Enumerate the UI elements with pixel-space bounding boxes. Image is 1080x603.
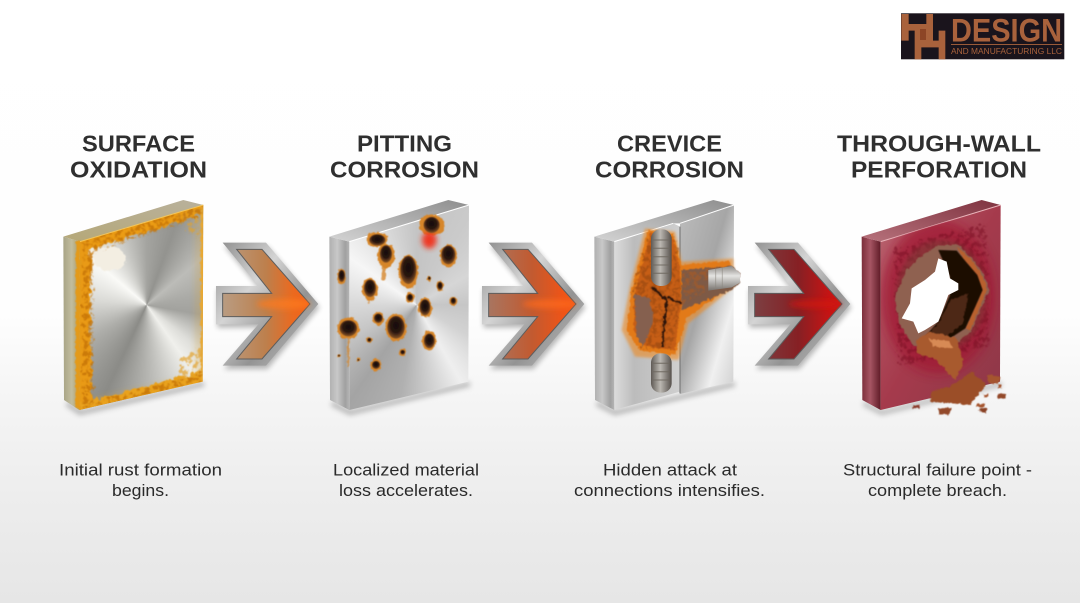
front flange: [614, 223, 680, 410]
heading: crevice corrosion: CREVICE: [617, 130, 722, 156]
back plate: [680, 205, 734, 394]
horizontal weld bead: [682, 266, 740, 310]
heading: through-wall perforation: THROUGH-WALL: [837, 130, 1041, 156]
icon: plate with pitting corrosion: [329, 200, 472, 418]
heading: surface oxidation: OXIDATION: [70, 156, 207, 182]
icon: plate with crevice corrosion at a welded joint: [594, 200, 740, 413]
rust halos: [337, 214, 457, 371]
caption: through-wall perforation: Structural failure point -: [843, 460, 1032, 480]
logo: AND MANUFACTURING LLC: [951, 47, 1062, 56]
caption: through-wall perforation: complete breach.: [868, 481, 1007, 500]
red glow: [422, 231, 437, 249]
see-through opening: [902, 258, 958, 333]
arrow 3: [748, 243, 852, 369]
heading: surface oxidation: SURFACE: [82, 130, 195, 156]
corroded rock: [634, 294, 653, 347]
heading: surface oxidation: [70, 130, 207, 182]
heading: crevice corrosion: [595, 130, 744, 182]
caption: crevice corrosion: [574, 460, 765, 500]
icon: plate with surface oxidation: [63, 200, 206, 418]
heading: through-wall perforation: [837, 130, 1041, 182]
vertical weld bead: [651, 229, 672, 393]
heading: pitting corrosion: PITTING: [357, 130, 452, 156]
logo: [901, 12, 1064, 59]
arrow 1: [216, 243, 320, 369]
caption: surface oxidation: Initial rust formation: [59, 460, 222, 480]
logo: DESIGN: [951, 12, 1062, 48]
caption: crevice corrosion: Hidden attack at: [603, 460, 737, 480]
dark interior: [925, 250, 983, 338]
caption: crevice corrosion: connections intensifies.: [574, 481, 765, 500]
pits: [338, 217, 456, 369]
heading: pitting corrosion: [330, 130, 479, 182]
rust halo: [622, 228, 734, 360]
heading: crevice corrosion: CORROSION: [595, 156, 744, 182]
broken flap: [917, 332, 963, 381]
debris: [913, 372, 1007, 415]
arrow 2: [482, 243, 586, 369]
icon: plate with through-wall perforation: [862, 200, 1007, 415]
caption: through-wall perforation: [843, 460, 1032, 500]
rim of the hole: [895, 245, 990, 347]
caption: surface oxidation: [59, 460, 222, 500]
caption: pitting corrosion: loss accelerates.: [339, 481, 473, 500]
heading: pitting corrosion: CORROSION: [330, 156, 479, 182]
caption: surface oxidation: begins.: [112, 481, 169, 500]
heading: through-wall perforation: PERFORATION: [851, 156, 1027, 182]
caption: pitting corrosion: [333, 460, 479, 500]
caption: pitting corrosion: Localized material: [333, 460, 479, 480]
